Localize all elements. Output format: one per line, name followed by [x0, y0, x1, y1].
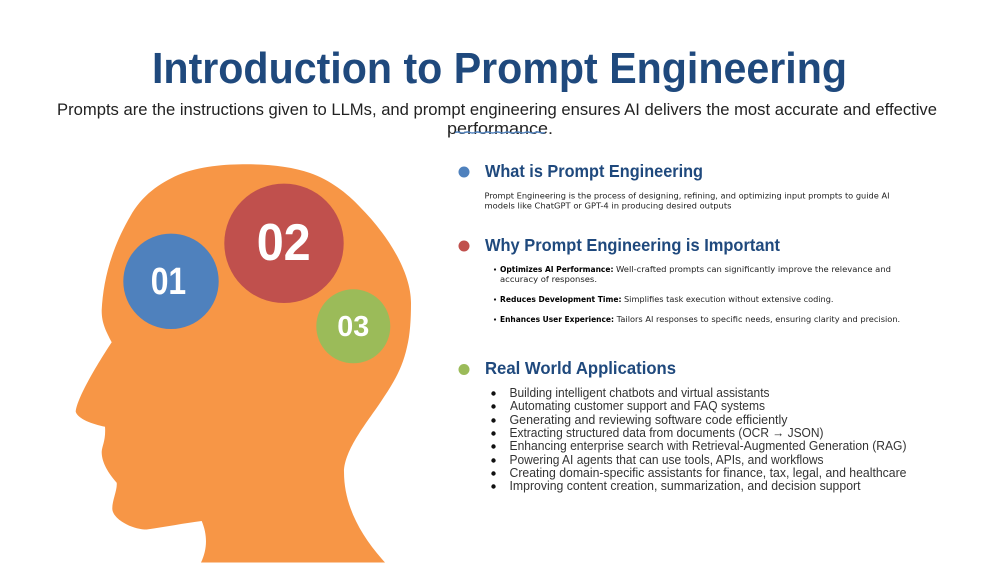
- description: [484, 190, 890, 210]
- blue dot: [458, 166, 470, 178]
- applications list: Enhancing enterprise search with Retrieval-Augmented Generation (RAG): [510, 439, 906, 453]
- subtitle: performance.: [447, 120, 553, 138]
- section: what is prompt engineering: [458, 161, 890, 210]
- applications list: Powering AI agents that can use tools, APIs, and workflows: [510, 453, 824, 467]
- applications list: Extracting structured data from documents (OCR → JSON): [510, 426, 824, 440]
- heading: Why Prompt Engineering is Important: [485, 235, 780, 255]
- applications list: [491, 386, 907, 493]
- circle 03: [316, 289, 390, 363]
- applications list: Improving content creation, summarization, and decision support: [510, 479, 861, 493]
- circle 01: 01: [151, 261, 186, 303]
- section: real world applications: [458, 358, 907, 493]
- benefit: optimizes AI performance: Well-crafted prompts can significantly improve the relevance and: [616, 264, 891, 274]
- title: Introduction to Prompt Engineering: [152, 44, 847, 93]
- benefit: optimizes AI performance: accuracy of responses.: [500, 274, 597, 284]
- benefit: enhances user experience: [494, 314, 900, 324]
- green dot: [458, 364, 470, 375]
- circle 03: 03: [337, 311, 369, 343]
- applications list: Automating customer support and FAQ systems: [510, 399, 765, 413]
- head silhouette: [76, 164, 411, 563]
- benefit: enhances user experience: Enhances User Experience:: [500, 314, 614, 324]
- subtitle: [57, 101, 937, 138]
- heading: Real World Applications: [485, 358, 676, 378]
- benefit: optimizes AI performance: [494, 264, 891, 284]
- benefit: enhances user experience: Tailors AI responses to specific needs, ensuring clarity and precision.: [616, 314, 900, 324]
- heading: What is Prompt Engineering: [485, 161, 703, 181]
- applications list: Creating domain-specific assistants for finance, tax, legal, and healthcare: [510, 466, 907, 480]
- applications list: Generating and reviewing software code efficiently: [510, 413, 788, 427]
- benefit: reduces development time: [494, 294, 834, 304]
- description: models like ChatGPT or GPT-4 in producing desired outputs: [484, 200, 732, 210]
- description: Prompt Engineering is the process of designing, refining, and optimizing input prompts to guide AI: [484, 190, 890, 200]
- section: why prompt engineering is important: [458, 235, 900, 324]
- circle 02: 02: [257, 214, 311, 272]
- benefit: reduces development time: Reduces Development Time:: [500, 294, 622, 304]
- circle 02: [224, 184, 344, 303]
- head illustration: [76, 164, 411, 563]
- red dot: [458, 240, 470, 252]
- benefit: reduces development time: Simplifies task execution without extensive coding.: [624, 294, 834, 304]
- benefit: optimizes AI performance: Optimizes AI Performance:: [500, 264, 614, 274]
- subtitle: Prompts are the instructions given to LLMs, and prompt engineering ensures AI delivers the most accurate and effective: [57, 101, 937, 119]
- circle 01: [123, 234, 219, 329]
- applications list: Building intelligent chatbots and virtual assistants: [510, 386, 770, 400]
